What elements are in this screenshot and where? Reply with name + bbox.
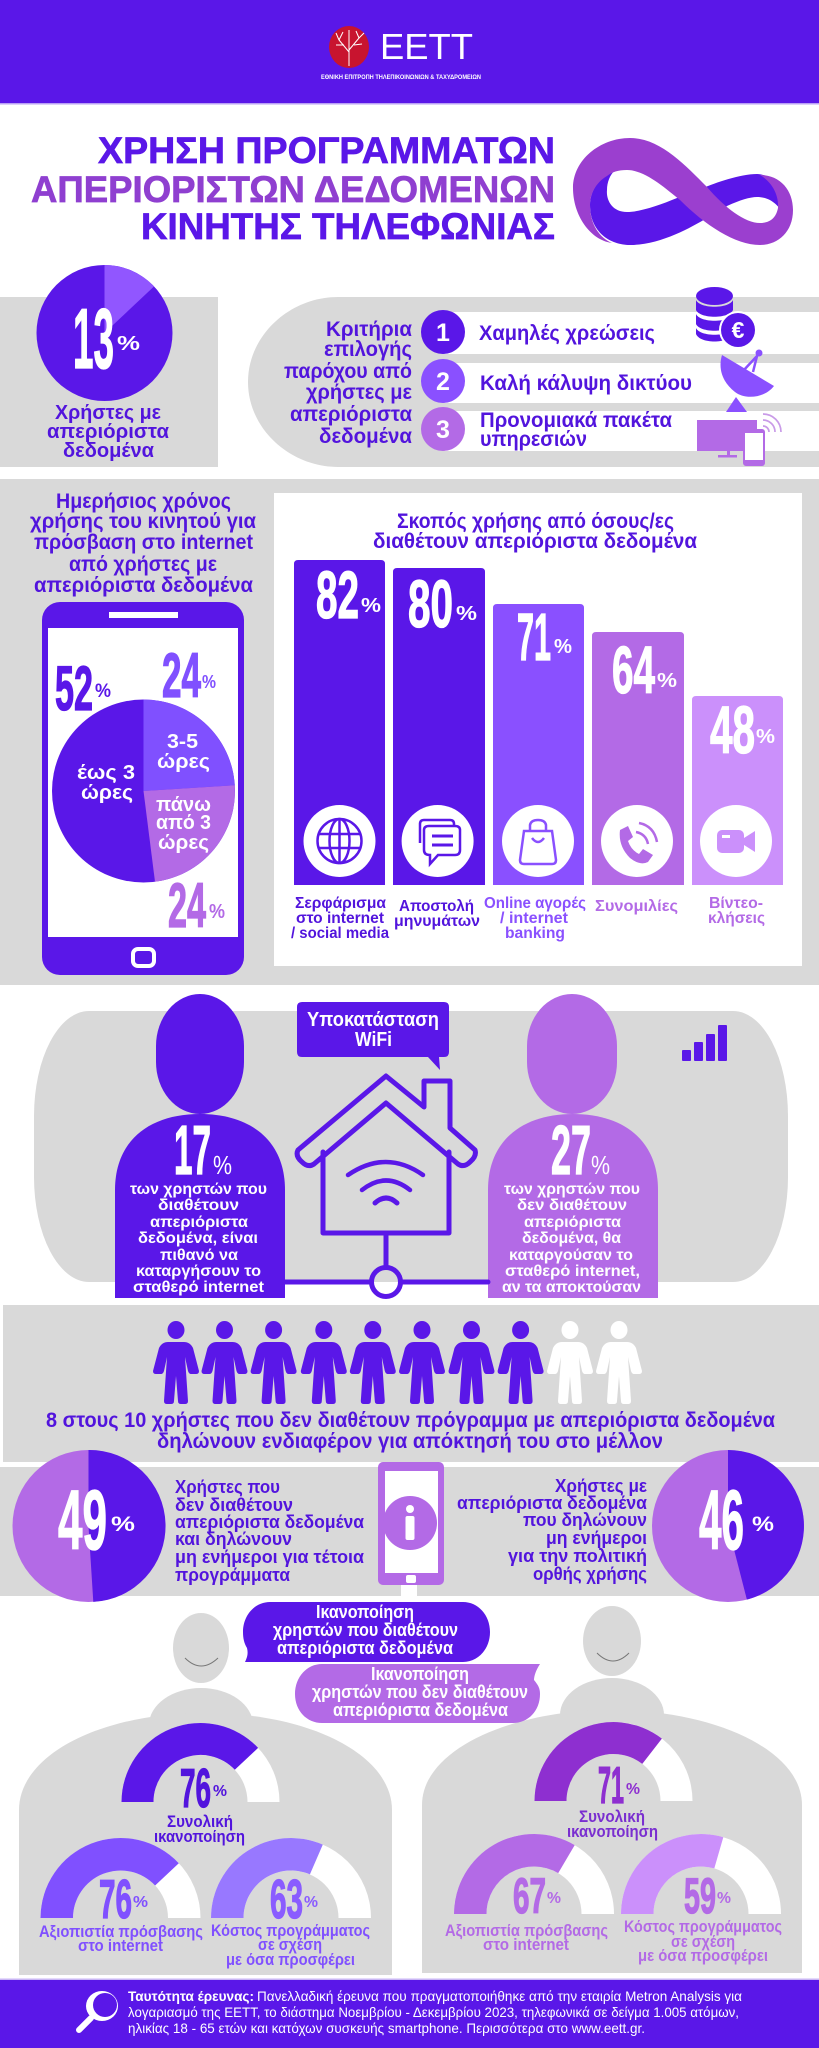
- criteria heading: απεριόριστα: [290, 403, 412, 426]
- bar: messages 80%: Αποστολή: [399, 898, 474, 915]
- gauge: overall 76%: [121, 1723, 279, 1846]
- criteria text: [479, 322, 692, 451]
- gauge: access reliability 67%: %: [547, 1890, 561, 1907]
- icon: signal bars: [682, 1025, 727, 1061]
- caption: δεδομένα: [63, 440, 155, 462]
- pie chart 49%: 49: [58, 1473, 107, 1567]
- pie values: %: [95, 681, 111, 702]
- survey text: λογαριασμό της ΕΕΤΤ, το διάστημα Νοεμβρίου - Δεκεμβρίου 2023, τηλεφωνικά σε δείγμα 1.005 ατόμων,: [128, 2004, 739, 2020]
- caption: Χρήστες με: [55, 402, 161, 424]
- caption: [47, 402, 170, 462]
- speech bubble: users with unlimited data: χρηστών που διαθέτουν: [273, 1620, 458, 1640]
- pie chart 49%: %: [111, 1513, 135, 1536]
- logo wordmark: EETT: [380, 26, 473, 67]
- gauge: access reliability 76%: Αξιοπιστία πρόσβασης: [39, 1922, 203, 1941]
- gauge: cost 59%: 59: [684, 1868, 716, 1924]
- person left 17%: απεριόριστα: [150, 1214, 248, 1231]
- text: users unaware of fair use: για την πολιτική: [508, 1545, 647, 1566]
- bar: calls 64%: Συνομιλίες: [595, 898, 678, 915]
- text: users unaware of fair use: [457, 1475, 648, 1584]
- person right 27%: 27: [551, 1111, 591, 1189]
- text: non-users unaware: Χρήστες που: [175, 1476, 280, 1497]
- panel: 13% users: [0, 265, 218, 467]
- text: users unaware of fair use: ορθής χρήσης: [533, 1563, 647, 1584]
- gauge: overall 76%: Συνολική: [167, 1812, 233, 1831]
- pie labels: πάνω: [156, 794, 211, 816]
- gauge: overall 71%: 71: [598, 1757, 624, 1815]
- gauge: cost 59%: %: [717, 1890, 731, 1907]
- gauge: cost 59%: σε σχέση: [671, 1932, 735, 1951]
- person right 27%: δεν διαθέτουν: [517, 1197, 627, 1214]
- criteria heading: Κριτήρια: [326, 318, 412, 341]
- number badges: [421, 310, 465, 451]
- pie chart 13%: [36, 265, 172, 401]
- survey text: ηλικίας 18 - 65 ετών και κατόχων συσκευής smartphone. Περισσότερα στο www.eett.gr.: [128, 2020, 645, 2036]
- bar: calls 64%: 64: [612, 633, 655, 708]
- person right 27%: [488, 994, 658, 1298]
- gauge: access reliability 67%: 67: [513, 1868, 546, 1924]
- survey text: Ταυτότητα έρευνας:: [128, 1988, 254, 2004]
- pie labels: ώρες: [81, 782, 133, 804]
- callout: WiFi substitution: WiFi: [355, 1029, 392, 1051]
- gauge: cost 63%: Κόστος προγράμματος: [211, 1921, 370, 1940]
- pictogram: 10 people: [153, 1321, 642, 1404]
- gauge: access reliability 76%: [39, 1838, 203, 1955]
- pie chart 46%: [652, 1450, 804, 1602]
- icon: EETT logo tree: [329, 26, 369, 68]
- caption: απεριόριστα: [47, 421, 170, 443]
- bar: video calls 48%: 48: [710, 693, 755, 768]
- icon: phone frame: [42, 602, 244, 975]
- bar: online shopping 71%: [484, 600, 586, 942]
- text: non-users unaware: απεριόριστα δεδομένα: [175, 1511, 365, 1532]
- person right 27%: απεριόριστα: [524, 1214, 621, 1231]
- person left 17%: %: [213, 1150, 232, 1180]
- bar: online shopping 71%: 71: [517, 600, 551, 675]
- text: users unaware of fair use: Χρήστες με: [555, 1475, 647, 1496]
- gauge: access reliability 67%: στο internet: [483, 1935, 569, 1954]
- bar: messages 80%: [393, 567, 485, 930]
- pie chart 46%: %: [752, 1513, 774, 1536]
- person left 17%: σταθερό internet: [133, 1279, 265, 1296]
- person right 27%: δεδομένα, θα: [522, 1230, 621, 1247]
- text: users unaware of fair use: μη ενήμεροι: [546, 1527, 647, 1548]
- panel: grey usage section: [0, 479, 819, 985]
- person right 27%: των χρηστών που: [504, 1181, 640, 1198]
- gauge: access reliability 76%: %: [133, 1894, 148, 1911]
- title: ΑΠΕΡΙΟΡΙΣΤΩΝ ΔΕΔΟΜΕΝΩΝ: [31, 168, 555, 210]
- pie labels: έως 3: [77, 762, 135, 784]
- person right 27%: %: [591, 1150, 610, 1180]
- gauge: overall 76%: ικανοποίηση: [154, 1827, 245, 1846]
- gauge: cost 63%: σε σχέση: [258, 1935, 322, 1954]
- panel: WiFi substitution: [34, 994, 788, 1298]
- title: [31, 129, 555, 247]
- gauge: overall 71%: ικανοποίηση: [567, 1822, 658, 1841]
- criteria text: Καλή κάλυψη δικτύου: [480, 372, 692, 395]
- gauge: cost 63%: %: [304, 1894, 318, 1911]
- gauge: access reliability 76%: 76: [99, 1868, 132, 1930]
- logo subtitle: ΕΘΝΙΚΗ ΕΠΙΤΡΟΠΗ ΤΗΛΕΠΙΚΟΙΝΩΝΙΩΝ & ΤΑΧΥΔΡΟΜΕΙΩΝ: [321, 74, 481, 81]
- person left 17%: δεδομένα, είναι: [138, 1230, 258, 1247]
- value 13%: %: [117, 333, 140, 355]
- silhouette right: [422, 1606, 802, 1973]
- statement text: 8 στους 10 χρήστες που δεν διαθέτουν πρόγραμμα με απεριόριστα δεδομένα: [46, 1409, 775, 1432]
- pie labels: ώρες: [157, 751, 210, 773]
- panel: satisfaction users without unlimited data: [422, 1606, 802, 1973]
- panel: awareness: [0, 1450, 819, 1602]
- pie values: [55, 641, 225, 941]
- text: non-users unaware: μη ενήμεροι για τέτοια: [175, 1546, 365, 1567]
- heading: daily time: απεριόριστα δεδομένα: [34, 574, 253, 597]
- bar: browsing 82%: 82: [316, 558, 359, 633]
- icon: satellite dish: [721, 350, 774, 412]
- person left 17%: πιθανό να: [160, 1247, 238, 1264]
- pie labels: [77, 731, 211, 854]
- gauge: overall 71%: [534, 1722, 692, 1841]
- criteria text: Χαμηλές χρεώσεις: [479, 322, 655, 345]
- text: users unaware of fair use: απεριόριστα δεδομένα: [457, 1492, 648, 1513]
- panel: 8 of 10 users interest: [3, 1305, 819, 1462]
- pie values: 24: [168, 871, 206, 941]
- chart heading: Σκοπός χρήσης από όσους/ες: [397, 510, 674, 533]
- person left 17%: διαθέτουν: [158, 1197, 239, 1214]
- criteria heading: παρόχου από: [284, 360, 412, 383]
- panel: satisfaction users with unlimited data: [19, 1613, 392, 1975]
- value 13%: 13: [73, 292, 114, 387]
- icon: monitor and phone: [697, 414, 781, 466]
- bar: calls 64%: [592, 632, 684, 915]
- criteria text: υπηρεσιών: [480, 428, 587, 451]
- text: non-users unaware: δεν διαθέτουν: [175, 1494, 293, 1515]
- icon: house with wifi: [285, 1076, 488, 1296]
- chart heading: [373, 510, 697, 553]
- speech bubble: users with unlimited data: [243, 1602, 490, 1662]
- icon: phone with info: [378, 1462, 444, 1585]
- gauge: access reliability 67%: Αξιοπιστία πρόσβασης: [445, 1921, 608, 1940]
- number badges: 3: [436, 416, 450, 444]
- survey text: Πανελλαδική έρευνα που πραγματοποιήθηκε από την εταιρία Metron Analysis για: [257, 1988, 742, 2004]
- bar: calls 64%: %: [657, 670, 677, 692]
- criteria heading: επιλογής: [324, 338, 412, 361]
- text: non-users unaware: [175, 1476, 365, 1585]
- person left 17%: καταργήσουν το: [136, 1263, 261, 1280]
- chart heading: διαθέτουν απεριόριστα δεδομένα: [373, 530, 697, 553]
- bar: video calls 48%: %: [756, 726, 775, 748]
- gauge: access reliability 67%: [445, 1834, 614, 1954]
- criteria text: Προνομιακά πακέτα: [480, 409, 672, 432]
- number badges: 2: [436, 368, 450, 396]
- bar: browsing 82%: [291, 558, 389, 942]
- pie labels: από 3: [156, 812, 211, 834]
- gauge: cost 63%: 63: [270, 1868, 303, 1930]
- person right 27%: σταθερό internet,: [505, 1263, 640, 1280]
- statement text: [46, 1409, 775, 1453]
- pie labels: 3-5: [167, 731, 198, 753]
- gauge: overall 76%: 76: [180, 1757, 211, 1819]
- speech bubble: users without unlimited data: Ικανοποίηση: [371, 1664, 469, 1684]
- header band with logo: [0, 0, 819, 104]
- title: ΧΡΗΣΗ ΠΡΟΓΡΑΜΜΑΤΩΝ: [98, 129, 555, 171]
- bar: messages 80%: %: [456, 603, 477, 625]
- pie values: %: [209, 901, 225, 923]
- text: non-users unaware: προγράμματα: [175, 1564, 291, 1585]
- gauge: overall 71%: Συνολική: [579, 1807, 645, 1826]
- speech bubble: users without unlimited data: χρηστών που δεν διαθέτουν: [312, 1682, 528, 1702]
- callout: WiFi substitution: [297, 1002, 449, 1070]
- heading: daily time: από χρήστες με: [69, 553, 217, 576]
- pie labels: ώρες: [158, 832, 209, 854]
- text: users unaware of fair use: που δηλώνουν: [523, 1509, 647, 1530]
- criteria heading: [284, 318, 412, 448]
- bar: browsing 82%: στο internet: [296, 910, 385, 927]
- silhouette left: [19, 1613, 392, 1975]
- criteria heading: δεδομένα: [319, 425, 412, 448]
- gauge: cost 63%: [211, 1838, 371, 1969]
- criteria heading: χρήστες με: [306, 381, 412, 404]
- gauge: cost 59%: με όσα προσφέρει: [638, 1946, 768, 1965]
- survey text: [128, 1988, 742, 2036]
- bar: online shopping 71%: Online αγορές: [484, 895, 586, 912]
- speech bubble: users with unlimited data: απεριόριστα δεδομένα: [277, 1638, 453, 1658]
- bar: browsing 82%: %: [361, 595, 381, 617]
- bar: video calls 48%: Βίντεο-: [709, 895, 763, 912]
- bar: video calls 48%: κλήσεις: [708, 910, 765, 927]
- bar: online shopping 71%: %: [554, 636, 572, 658]
- speech bubble: users without unlimited data: [295, 1664, 540, 1723]
- pie chart 49%: [12, 1450, 166, 1602]
- title: ΚΙΝΗΤΗΣ ΤΗΛΕΦΩΝΙΑΣ: [141, 205, 555, 247]
- bar: browsing 82%: / social media: [291, 925, 389, 942]
- gauge: overall 71%: %: [626, 1781, 640, 1798]
- person left 17%: [115, 994, 285, 1298]
- heading: daily time: χρήσης του κινητού για: [30, 510, 256, 533]
- icon: magnifying glass: [79, 1991, 118, 2030]
- bar: online shopping 71%: / internet: [500, 910, 569, 927]
- statement text: δηλώνουν ενδιαφέρον για απόκτησή του στο μέλλον: [157, 1430, 663, 1453]
- number badges: 1: [436, 319, 450, 347]
- bar: browsing 82%: Σερφάρισμα: [295, 895, 386, 912]
- gauge: cost 63%: με όσα προσφέρει: [226, 1950, 355, 1969]
- gauge: overall 76%: %: [213, 1783, 227, 1800]
- footer: survey identity: [0, 1978, 819, 2048]
- gauge: cost 59%: Κόστος προγράμματος: [624, 1917, 782, 1936]
- gauge: cost 59%: [621, 1834, 782, 1965]
- text: non-users unaware: και δηλώνουν: [175, 1528, 292, 1549]
- pie values: 24: [162, 641, 201, 711]
- pie values: 52: [55, 654, 93, 724]
- icon: database and euro: [696, 287, 757, 349]
- bar: messages 80%: 80: [408, 567, 453, 642]
- speech bubble: users with unlimited data: Ικανοποίηση: [316, 1602, 414, 1622]
- panel: purpose of use chart: [274, 493, 802, 966]
- gauge: access reliability 76%: στο internet: [78, 1936, 163, 1955]
- panel: provider selection criteria: [248, 287, 819, 467]
- pie chart: daily time: [52, 700, 235, 882]
- person left 17%: των χρηστών που: [130, 1181, 267, 1198]
- pie chart 46%: 46: [699, 1473, 744, 1567]
- person left 17%: 17: [174, 1111, 211, 1189]
- bar: online shopping 71%: banking: [505, 925, 565, 942]
- heading: daily time: πρόσβαση στο internet: [34, 531, 253, 554]
- icon: database and euro: €: [732, 317, 745, 343]
- pie values: %: [202, 672, 216, 692]
- heading: daily time: [30, 490, 256, 597]
- bar: messages 80%: μηνυμάτων: [394, 913, 480, 930]
- speech bubble: users without unlimited data: απεριόριστα δεδομένα: [333, 1700, 508, 1720]
- callout: WiFi substitution: Υποκατάσταση: [307, 1009, 439, 1031]
- person right 27%: καταργούσαν το: [509, 1247, 633, 1264]
- person right 27%: αν τα αποκτούσαν: [502, 1279, 641, 1296]
- bar: video calls 48%: [692, 693, 783, 927]
- heading: daily time: Ημερήσιος χρόνος: [56, 490, 231, 513]
- icon: infinity ribbon: [573, 138, 793, 245]
